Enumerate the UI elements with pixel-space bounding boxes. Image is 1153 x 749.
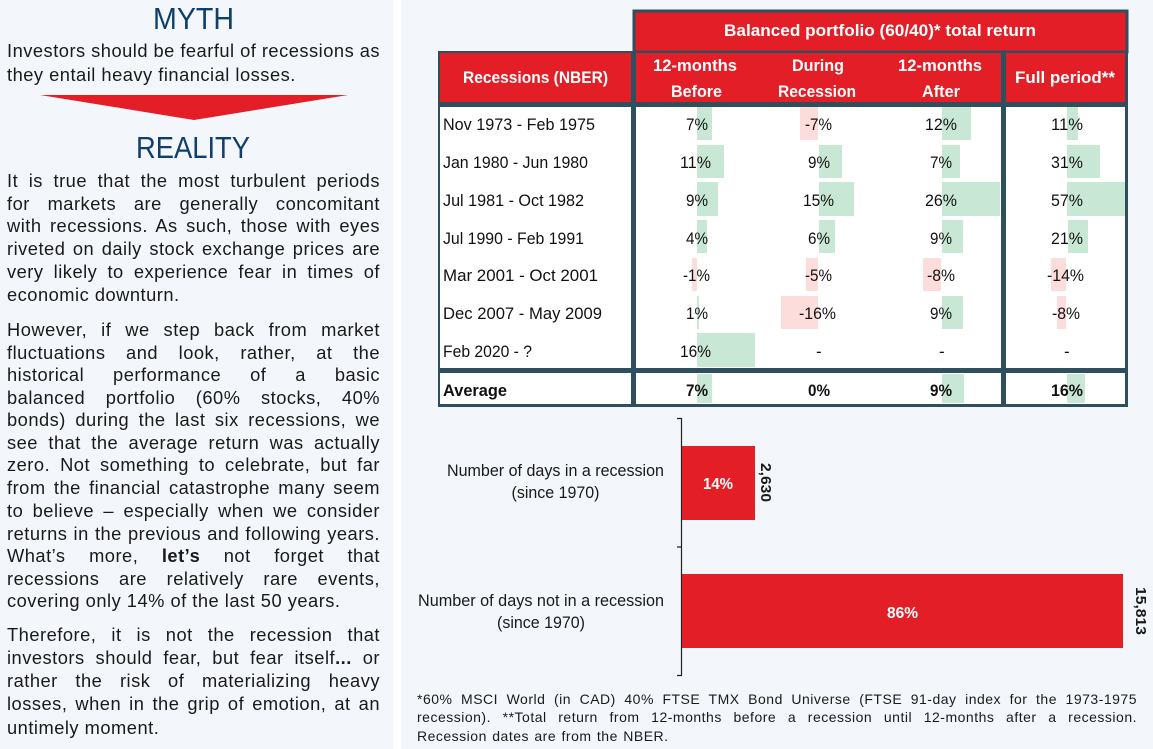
footnote: Recession dates are from the NBER. <box>417 728 669 744</box>
text: reality paragraph 2: bonds) during the last six recessions, we <box>7 409 380 430</box>
text: reality paragraph 2: from the financial catastrophe many seem <box>7 477 380 498</box>
header: recessions column: Recessions (NBER) <box>463 68 608 87</box>
footnote <box>417 691 1137 744</box>
label: days not in a recession <box>418 592 664 632</box>
label: days in a recession: Number of days in a recession <box>447 462 664 480</box>
row labels: Mar 2001 - Oct 2001 <box>443 266 598 285</box>
heading: myth: MYTH <box>153 2 234 36</box>
values: 12-months after <box>925 115 957 400</box>
chart axis <box>677 418 682 676</box>
text: reality paragraph 3: losses, when in the grip of emotion, at an <box>7 693 380 714</box>
values: full period: - <box>1064 342 1070 361</box>
text: reality paragraph 2: historical performance of a basic <box>7 364 380 385</box>
values: 12-months after: 9% <box>930 381 952 400</box>
footnote: *60% MSCI World (in CAD) 40% FTSE TMX Bond Universe (FTSE 91-day index for the 1973-1975 <box>417 691 1137 707</box>
bar: days in a recession <box>682 446 755 520</box>
label: days not in a recession: (since 1970) <box>497 614 585 632</box>
values: during recession: - <box>816 342 822 361</box>
values: 12-months after: 9% <box>930 229 952 248</box>
table: balanced portfolio returns by recession <box>438 11 1128 407</box>
label: days not in a recession: Number of days not in a recession <box>418 592 664 610</box>
header: balanced portfolio <box>634 11 1127 52</box>
values: during recession: 15% <box>803 191 834 210</box>
header: full period: Full period** <box>1015 68 1115 87</box>
values: during recession: 0% <box>808 381 830 400</box>
header: full period <box>1006 53 1126 102</box>
row labels <box>443 115 602 400</box>
text: reality paragraph 3 <box>7 624 380 738</box>
values: full period <box>1047 115 1084 400</box>
row labels: Jul 1990 - Feb 1991 <box>443 229 584 248</box>
panel: left background <box>0 0 393 749</box>
values: during recession: -5% <box>805 266 832 285</box>
heading: reality: REALITY <box>136 131 250 165</box>
text: reality paragraph 2 <box>7 319 380 611</box>
text: reality paragraph 2: to believe – especially when we consider <box>7 500 380 521</box>
arrow: down triangle <box>40 95 348 120</box>
row labels: Feb 2020 - ? <box>443 342 532 361</box>
values: during recession: -16% <box>799 304 836 323</box>
text: reality paragraph 2: However, if we step back from market <box>7 319 380 340</box>
text: reality paragraph 1: for markets are generally concomitant <box>7 193 380 214</box>
values: 12-months before: 9% <box>686 191 708 210</box>
panel: myth and reality text <box>7 2 380 738</box>
header: return periods: Before <box>671 82 722 101</box>
values: full period: 16% <box>1051 381 1083 400</box>
header: return periods <box>636 53 1001 102</box>
label: days in a recession: (since 1970) <box>512 484 600 502</box>
header: balanced portfolio: Balanced portfolio (60/40)* total return <box>724 21 1036 40</box>
values: 12-months before: -1% <box>683 266 710 285</box>
values: full period: 57% <box>1051 191 1083 210</box>
values: full period: 21% <box>1051 229 1083 248</box>
values: 12-months after: 26% <box>925 191 957 210</box>
value: 15,813: 15,813 <box>1132 587 1149 635</box>
text: reality paragraph 3: Therefore, it is not the recession that <box>7 624 380 645</box>
header: return periods: During <box>792 56 844 75</box>
row labels: Average <box>443 381 507 400</box>
panel: right background <box>401 0 1153 749</box>
row labels: Dec 2007 - May 2009 <box>443 304 602 323</box>
values: during recession: 9% <box>808 153 830 172</box>
header: return periods: 12-months <box>898 56 982 75</box>
bar: days not in a recession: 86% <box>887 605 918 622</box>
values: 12-months before: 7% <box>686 381 708 400</box>
text: reality paragraph 3: investors should fear, but fear itself... or <box>7 647 380 668</box>
values: during recession: 6% <box>808 229 830 248</box>
values: full period: 31% <box>1051 153 1083 172</box>
bar chart: days in and not in a recession <box>418 418 1149 676</box>
text: reality paragraph 2: What’s more, let’s not forget that <box>7 545 380 566</box>
header: return periods: Recession <box>778 82 856 101</box>
values: 12-months after: -8% <box>927 266 955 285</box>
text: reality paragraph 1 <box>7 170 380 305</box>
header: return periods: 12-months <box>653 56 737 75</box>
values: 12-months before: 1% <box>686 304 708 323</box>
value: 2,630: 2,630 <box>757 463 774 502</box>
text: reality paragraph 1: riveted on daily stock exchange prices are <box>7 238 380 259</box>
values: during recession: -7% <box>805 115 832 134</box>
values: 12-months before <box>680 115 711 400</box>
values: during recession <box>799 115 836 400</box>
text: myth statement: they entail heavy financial losses. <box>7 64 296 85</box>
text: reality paragraph 1: with recessions. As such, those with eyes <box>7 215 380 236</box>
values: 12-months before: 11% <box>680 153 711 172</box>
values: 12-months after: 7% <box>930 153 952 172</box>
label: days in a recession <box>447 462 664 502</box>
text: reality paragraph 2: zero. Not something to celebrate, but far <box>7 454 380 475</box>
values: 12-months before: 16% <box>680 342 711 361</box>
values: full period: -8% <box>1052 304 1080 323</box>
footnote: recession). **Total return from 12-months before a recession until 12-months after a recession. <box>417 709 1137 725</box>
header: return periods: After <box>922 82 960 101</box>
row labels: Jul 1981 - Oct 1982 <box>443 191 584 210</box>
text: myth statement <box>7 40 380 85</box>
table body background <box>438 51 1128 407</box>
text: reality paragraph 1: economic downturn. <box>7 284 180 305</box>
text: reality paragraph 2: recessions are relatively rare events, <box>7 568 380 589</box>
values: 12-months after: 9% <box>930 304 952 323</box>
text: reality paragraph 3: rather the risk of materializing heavy <box>7 670 380 691</box>
values: 12-months after: 12% <box>925 115 957 134</box>
row labels: Jan 1980 - Jun 1980 <box>443 153 588 172</box>
header: recessions column <box>439 53 631 102</box>
values: full period: -14% <box>1047 266 1084 285</box>
values: 12-months after: - <box>939 342 945 361</box>
row labels: Nov 1973 - Feb 1975 <box>443 115 595 134</box>
text: reality paragraph 2: returns in the previous and following years. <box>7 523 380 544</box>
values: 12-months before: 4% <box>686 229 708 248</box>
text: myth statement: Investors should be fearful of recessions as <box>7 40 380 61</box>
bar: days not in a recession <box>682 574 1123 648</box>
bar: days in a recession: 14% <box>703 476 733 493</box>
text: reality paragraph 1: It is true that the most turbulent periods <box>7 170 380 191</box>
text: reality paragraph 2: see that the average return was actually <box>7 432 380 453</box>
table frame lines <box>438 51 1128 407</box>
text: reality paragraph 2: covering only 14% of the last 50 years. <box>7 590 341 611</box>
text: reality paragraph 2: fluctuations and look, rather, at the <box>7 342 380 363</box>
green and red data bars <box>692 107 1125 403</box>
text: reality paragraph 2: balanced portfolio (60% stocks, 40% <box>7 387 380 408</box>
values: 12-months before: 7% <box>686 115 708 134</box>
text: reality paragraph 1: very likely to experience fear in times of <box>7 261 380 282</box>
values: full period: 11% <box>1051 115 1083 134</box>
text: reality paragraph 3: untimely moment. <box>7 717 159 738</box>
